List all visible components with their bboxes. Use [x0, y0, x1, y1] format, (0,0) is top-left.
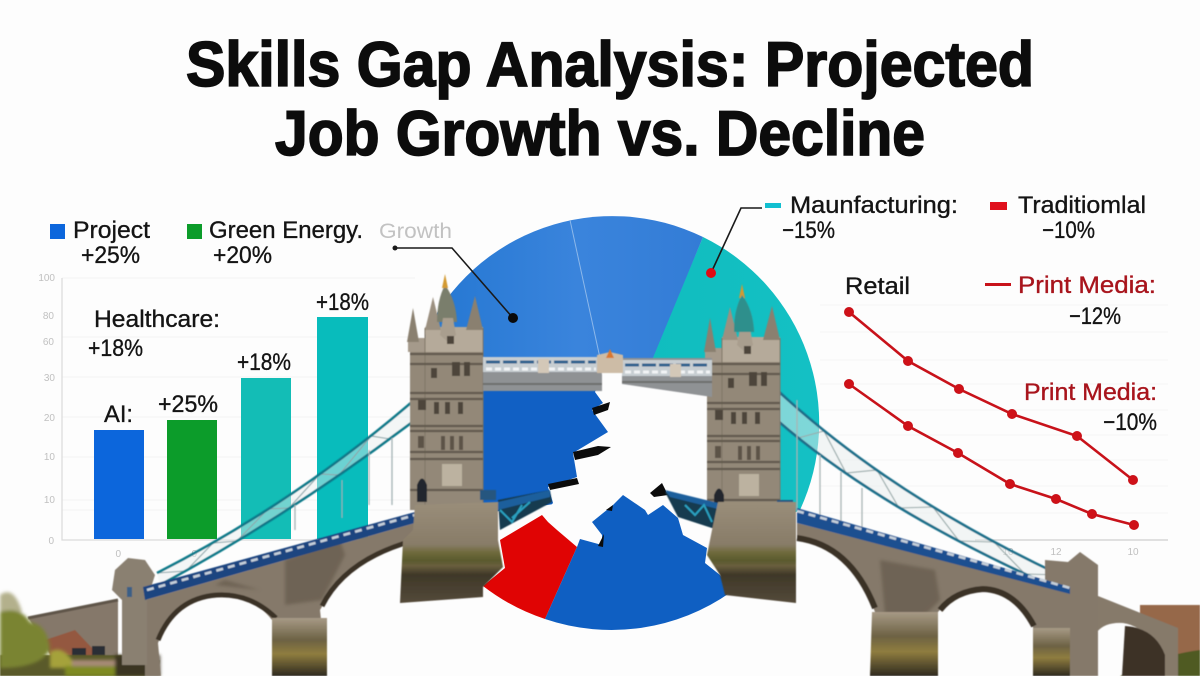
abutment window: [127, 587, 132, 597]
callout: growth: [379, 220, 518, 323]
legend: manufacturing: [765, 192, 958, 244]
bar: project: [317, 317, 368, 539]
arch shadow right: [797, 538, 1034, 626]
axis tick labels: 0: [48, 536, 54, 547]
pie segment: dark blue lower: [545, 495, 731, 630]
axis tick labels: 0: [115, 549, 121, 560]
bar: green energy: [167, 420, 217, 539]
bar: AI: [94, 430, 144, 539]
line chart ticks: 10: [1127, 547, 1139, 558]
bar labels: [88, 289, 369, 428]
line: print media: [844, 380, 1138, 530]
far right arch interior: [1122, 626, 1165, 676]
left tower: [407, 274, 496, 510]
legend: green energy: Green Energy.: [209, 217, 363, 244]
crest tip: [606, 349, 614, 358]
Tower Bridge illustration: [0, 274, 1200, 676]
far left wall: [28, 600, 118, 655]
right arch stonework: [797, 523, 1098, 676]
right deck: [797, 508, 1070, 594]
bar labels: +18%: [88, 335, 143, 362]
legend: traditional: −10%: [1042, 217, 1095, 244]
left pier: [400, 502, 503, 603]
line labels: Retail: [845, 273, 910, 300]
right river pier 2: [1033, 628, 1095, 676]
axis tick labels: 80: [43, 311, 54, 322]
bar labels: AI:: [104, 401, 133, 428]
left abutment tower: [112, 558, 155, 665]
left deck railing: [147, 515, 415, 590]
legend: green energy: +20%: [213, 242, 272, 269]
title: [186, 30, 1034, 169]
house windows: [72, 646, 105, 660]
title: Job Growth vs. Decline: [275, 99, 925, 169]
axis tick labels: 10: [44, 495, 55, 506]
bar labels: +18%: [316, 289, 369, 316]
riverside embankment: [0, 655, 160, 676]
line labels: [845, 272, 1157, 436]
far right wall: [1097, 596, 1178, 676]
legend: green energy: [187, 217, 363, 269]
high walkway: [483, 349, 712, 397]
pie segment: light blue: [425, 216, 703, 365]
axis tick labels: 30: [44, 373, 55, 384]
callout: growth: Growth: [379, 220, 452, 243]
arch shadow left: [158, 541, 412, 640]
line: retail: [844, 308, 1138, 484]
bar: healthcare: [241, 378, 291, 539]
axis tick labels: 20: [44, 413, 55, 424]
stone mottling left: [165, 540, 345, 610]
line labels: −10%: [1103, 409, 1157, 436]
left deck: [143, 512, 415, 600]
left arch stonework: [145, 523, 415, 676]
axis tick labels: 60: [43, 337, 54, 348]
pie segment: teal: [640, 237, 819, 520]
legend: project: Project: [73, 217, 150, 244]
right riverside bushes: [1120, 650, 1200, 676]
axis tick labels: 100: [38, 273, 55, 284]
right abutment tower: [1045, 552, 1098, 676]
line chart ticks: [1002, 547, 1139, 558]
legend: traditional: [990, 192, 1146, 244]
line labels: −12%: [1069, 303, 1121, 330]
bar labels: Healthcare:: [94, 306, 220, 333]
axis tick labels: 0: [191, 549, 197, 560]
legend: manufacturing: Maunfacturing:: [790, 192, 958, 219]
line chart ticks: 12: [1050, 547, 1062, 558]
right pier: [707, 502, 796, 603]
line labels: Print Media:: [1018, 272, 1156, 299]
left river pier: [272, 618, 327, 676]
title: Skills Gap Analysis: Projected: [186, 30, 1034, 100]
axis tick labels: 10: [44, 452, 55, 463]
pie segment: dark blue upper: [470, 385, 620, 515]
left suspension cables: [157, 395, 420, 585]
torn edge slivers: [548, 402, 668, 547]
right side span: [797, 508, 1200, 676]
pie divider: [570, 220, 600, 358]
right suspension cables: [777, 390, 1060, 590]
legend: traditional: Traditiomlal: [1018, 192, 1146, 219]
right deck railing: [797, 511, 1070, 588]
right river pier 1: [870, 612, 938, 676]
pie segment: red: [483, 515, 577, 619]
riverside house: [45, 630, 92, 660]
legend: manufacturing: −15%: [782, 217, 835, 244]
riverside trees: [0, 592, 160, 676]
legend: project: [50, 217, 150, 269]
left bascule: [498, 490, 552, 530]
callout: manufacturing leader: [706, 208, 762, 278]
right tower: [704, 284, 793, 520]
walkway centre crest: [597, 352, 623, 373]
torn white gap: [470, 375, 765, 592]
line chart: job decline: [820, 305, 1168, 558]
far right buildings: [1140, 605, 1200, 676]
legend: project: +25%: [81, 242, 140, 269]
left side span: [0, 512, 415, 676]
line chart ticks: 10: [1002, 547, 1014, 558]
right tower teal roof: [734, 295, 754, 332]
pie chart torn by the bridge: [425, 216, 819, 630]
bar labels: +25%: [158, 391, 218, 418]
stone mottling right: [880, 560, 940, 615]
bar labels: +18%: [237, 349, 291, 376]
right bascule: [665, 490, 718, 530]
far left balustrade: [28, 600, 118, 618]
axis tick labels: [38, 273, 197, 560]
line labels: Print Media:: [1024, 379, 1157, 406]
bar chart: job growth: [38, 273, 415, 560]
